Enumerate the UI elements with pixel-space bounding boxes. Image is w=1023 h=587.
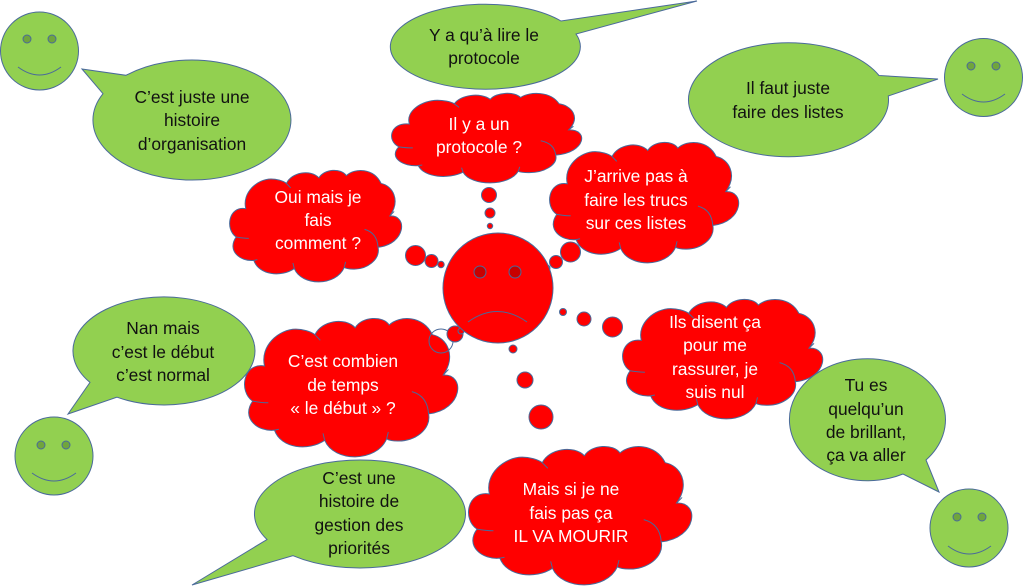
thought cloud: protocole: protocole ? xyxy=(436,137,522,157)
speech bubble: organisation: histoire xyxy=(164,110,220,130)
thought cloud: rassurer xyxy=(623,299,823,419)
speech bubble: brillant: quelqu’un xyxy=(828,399,904,419)
speech bubble: brillant: ça va aller xyxy=(826,445,906,465)
speech bubble: le début: c’est le début xyxy=(112,342,214,362)
thought cloud: listes: sur ces listes xyxy=(586,213,687,233)
speech bubble: lire le protocole: Y a qu’à lire le xyxy=(429,25,539,45)
speech bubble: brillant xyxy=(789,359,945,492)
speech bubble: priorités: C’est une xyxy=(322,468,396,488)
thought cloud: comment: comment ? xyxy=(275,233,361,253)
thought cloud: listes xyxy=(550,142,739,263)
thought cloud: listes: J’arrive pas à xyxy=(584,166,688,186)
speech bubble: le début xyxy=(68,297,255,414)
speech bubble: faire des listes: Il faut juste xyxy=(746,78,830,98)
thought cloud: il va mourir: Mais si je ne xyxy=(523,479,619,499)
speech bubble: brillant: de brillant, xyxy=(826,422,906,442)
smiley: left xyxy=(15,417,93,495)
thought dots: lower left xyxy=(429,326,464,353)
speech bubble: priorités xyxy=(192,460,465,585)
speech bubble: le début: Nan mais xyxy=(126,318,200,338)
speech bubble: lire le protocole xyxy=(390,1,697,89)
thought cloud: combien de temps: de temps xyxy=(307,375,379,395)
thought dots: lower right xyxy=(560,308,622,337)
thought cloud: rassurer: Ils disent ça xyxy=(669,312,761,332)
thought cloud: comment: Oui mais je xyxy=(275,187,361,207)
thought cloud: listes: faire les trucs xyxy=(584,190,688,210)
speech bubble: priorités: gestion des xyxy=(315,515,404,535)
thought cloud: combien de temps: « le début » ? xyxy=(290,398,396,418)
thought dots: upper right xyxy=(544,242,580,271)
speech bubble: priorités: priorités xyxy=(328,538,390,558)
thought cloud: combien de temps: C’est combien xyxy=(288,351,398,371)
thought cloud: rassurer: suis nul xyxy=(686,382,744,402)
smiley: bottom right xyxy=(930,489,1008,567)
speech bubble: organisation xyxy=(82,60,291,180)
thought cloud: comment: fais xyxy=(304,210,332,230)
speech bubble: le début: c’est normal xyxy=(116,365,210,385)
smiley: top left xyxy=(0,12,78,90)
speech bubble: organisation: C’est juste une xyxy=(134,87,250,107)
thought cloud: protocole: Il y a un xyxy=(449,114,509,134)
speech bubble: faire des listes: faire des listes xyxy=(732,102,844,122)
sad face xyxy=(443,233,553,343)
thought dots: upper left xyxy=(406,246,444,268)
thought dots: top xyxy=(482,188,496,229)
thought cloud: protocole xyxy=(392,93,582,183)
thought cloud: rassurer: rassurer, je xyxy=(672,359,758,379)
thought cloud: il va mourir: fais pas ça xyxy=(529,503,613,523)
smiley: top right xyxy=(944,38,1022,116)
speech bubble: faire des listes xyxy=(689,43,938,157)
thought dots: bottom xyxy=(509,345,553,429)
speech bubble: brillant: Tu es xyxy=(845,375,888,395)
thought cloud: il va mourir xyxy=(469,446,692,585)
thought cloud: combien de temps xyxy=(245,318,458,457)
speech bubble: organisation: d’organisation xyxy=(138,134,246,154)
thought cloud: il va mourir: IL VA MOURIR xyxy=(514,526,628,546)
thought cloud: comment xyxy=(230,170,402,282)
thought cloud: rassurer: pour me xyxy=(683,335,747,355)
speech bubble: lire le protocole: protocole xyxy=(448,48,520,68)
speech bubble: priorités: histoire de xyxy=(319,491,399,511)
